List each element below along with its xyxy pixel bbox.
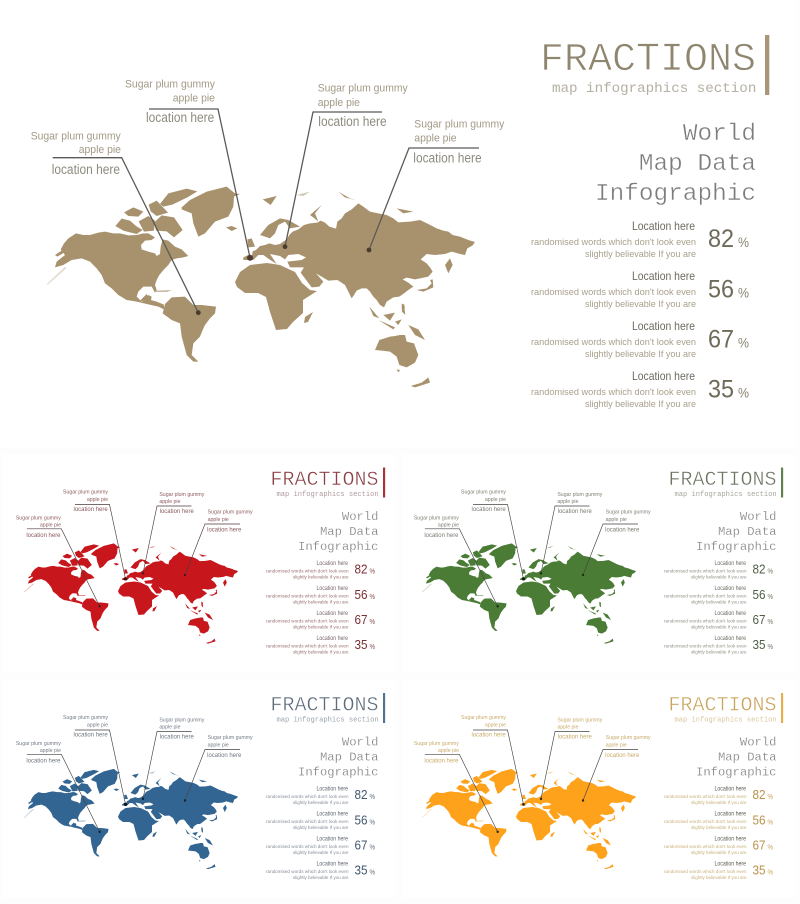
stat row: 67%: slightly believable If you are [585,348,696,359]
stat row: 67%: 67 [708,326,734,354]
heading: world map data infographic: Map Data [639,151,756,178]
stat row: 82%: % [738,234,749,250]
callout: central europe: location here [558,508,592,515]
callout: russia: apple pie [606,742,627,748]
callout: russia: apple pie [414,133,457,145]
callout: russia: location here [207,752,242,759]
stat row: 67%: randomised words which don't look even [266,618,349,624]
stat row: 56%: 56 [354,813,368,827]
stat row: 35%: randomised words which don't look even [531,386,696,397]
accent bar [781,693,783,723]
callout: west europe: location here [472,732,506,738]
world map [422,769,636,869]
stat row: 82% [664,561,773,580]
callout: central europe: apple pie [159,499,180,505]
callout: russia: location here [207,526,242,533]
stat row: 56% [266,812,375,830]
stat row: 67%: randomised words which don't look even [266,844,349,849]
stat row: 56%: 56 [752,813,766,827]
heading: world map data infographic [696,510,776,554]
stat row: 67%: % [768,619,773,626]
subheading: map infographics section [276,491,379,499]
world map [24,769,238,869]
stat row: 35% [531,369,749,409]
callout: south america: apple pie [40,522,61,528]
stat row: 35%: % [370,644,375,651]
callout: central europe: apple pie [557,724,578,730]
stat row: 35%: % [768,869,773,876]
stat row: 56%: % [370,819,375,826]
stat row: 35% [266,636,375,654]
stat row: 56%: Location here [714,586,747,592]
callout: west europe: apple pie [87,497,108,503]
heading: world map data infographic: Map Data [718,525,776,539]
callout: russia: Sugar plum gummy [606,735,651,741]
stat row: 82%: Location here [714,561,747,567]
callout: west europe: Sugar plum gummy [461,490,506,496]
world map [422,543,636,644]
stat row: 56%: slightly believable If you are [585,298,696,309]
callout: russia: Sugar plum gummy [208,735,253,741]
stat row: 67%: Location here [316,836,349,842]
accent bar [383,693,385,723]
stat row: 35%: % [738,384,749,400]
callout: central europe: Sugar plum gummy [557,717,603,723]
stat row: 56%: % [370,594,375,601]
callout: south america: apple pie [438,748,459,754]
stat row: 56%: randomised words which don't look even [664,594,747,598]
callout: russia: apple pie [208,742,229,748]
callout: russia [367,118,505,252]
callout: central europe [540,492,603,575]
callout: central europe [540,717,603,800]
stat row: 35%: randomised words which don't look even [266,644,349,648]
subheading: map infographics section [674,491,777,499]
world map [47,187,475,387]
stat row: 82%: slightly believable If you are [691,800,747,805]
callout: west europe [63,490,127,581]
heading: fractions: FRACTIONS [540,38,756,83]
stat row: 82%: slightly believable If you are [293,800,349,805]
stat row: 35%: slightly believable If you are [293,875,349,880]
stat row: 56%: Location here [632,269,695,283]
stat row: 35%: slightly believable If you are [691,875,747,880]
stat row: 82%: 82 [708,225,734,253]
stat row: 82%: 82 [752,562,766,576]
stat row: 56%: % [768,594,773,601]
callout: south america: apple pie [40,748,61,754]
heading: world map data infographic: World [740,736,776,750]
stat row: 35%: % [768,644,773,651]
heading: world map data infographic: Map Data [718,750,776,764]
stat row: 56%: Location here [316,586,349,592]
callout: central europe [142,717,205,800]
stat row: 67%: % [768,844,773,851]
callout: central europe: Sugar plum gummy [318,83,408,95]
callout: south america [414,516,499,608]
callout: west europe: apple pie [485,722,506,728]
callout: south america: apple pie [438,522,459,528]
callout: central europe: apple pie [159,724,180,730]
callout: south america: location here [424,758,459,764]
stat row: 67%: randomised words which don't look even [664,844,747,849]
stat row: 67%: Location here [714,836,747,842]
callout: central europe: Sugar plum gummy [557,492,603,498]
callout: west europe: location here [74,732,108,738]
stat row: 67%: % [370,844,375,851]
stat row: 67%: 67 [752,613,766,627]
stat row: 56% [531,269,749,309]
callout: west europe: Sugar plum gummy [63,715,108,721]
panel: blue slide [2,680,396,898]
stat row: 56%: % [738,284,749,300]
stat row: 56%: 56 [708,276,734,304]
callout: central europe: location here [318,114,387,129]
heading: world map data infographic: World [342,510,378,524]
stat row: 56%: randomised words which don't look even [266,819,349,824]
stat row: 67% [266,836,375,855]
panel: red slide [2,454,396,672]
heading: world map data infographic: World [342,736,378,750]
stat row: 82%: randomised words which don't look even [266,794,349,799]
stat row: 82%: Location here [714,786,747,792]
subheading: map infographics section [276,716,379,724]
panel: green slide [402,454,796,672]
stat row: 67% [266,611,375,630]
stat row: 82%: Location here [632,219,695,233]
stat row: 82%: slightly believable If you are [691,574,747,580]
stat row: 82%: randomised words which don't look even [531,236,696,247]
stat row: 56%: randomised words which don't look even [531,286,696,297]
stat row: 82%: 82 [354,788,368,802]
stat row: 56%: slightly believable If you are [293,600,349,604]
stat row: 67%: Location here [316,611,349,617]
subheading: map infographics section [552,81,756,97]
heading: world map data infographic: World [740,510,776,524]
callout: south america: Sugar plum gummy [414,741,459,747]
stat row: 67%: slightly believable If you are [293,624,349,630]
stat row: 35%: 35 [354,863,368,877]
heading: world map data infographic [696,736,776,780]
stat row: 82%: slightly believable If you are [293,574,349,580]
subheading: map infographics section [674,716,777,724]
stat row: 35%: slightly believable If you are [585,398,696,409]
heading: world map data infographic: Infographic [696,540,776,554]
callout: russia [184,510,253,576]
callout: west europe: location here [472,506,506,513]
stat row: 35%: randomised words which don't look even [664,869,747,874]
stat row: 56% [266,586,375,604]
callout: south america: Sugar plum gummy [414,516,459,522]
callout: russia: Sugar plum gummy [208,510,253,516]
callout: central europe: location here [160,508,194,515]
heading: world map data infographic: Infographic [298,540,378,554]
callout: west europe: apple pie [87,722,108,728]
stat row: 67% [664,611,773,630]
stat row: 35%: slightly believable If you are [691,650,747,654]
callout: south america: Sugar plum gummy [16,741,61,747]
stat row: 35%: % [370,869,375,876]
callout: central europe: apple pie [318,97,360,109]
world map [24,543,238,644]
heading: fractions: FRACTIONS [270,469,379,492]
callout: south america: apple pie [79,144,121,156]
stat row: 35%: randomised words which don't look even [664,644,747,648]
stat row: 67%: randomised words which don't look even [664,618,747,624]
stat row: 82%: 82 [354,562,368,576]
panel: orange slide [402,680,796,898]
callout: west europe: apple pie [485,497,506,503]
accent bar [765,35,769,95]
stat row: 67%: randomised words which don't look even [531,336,696,347]
callout: central europe [142,492,205,575]
callout: west europe [461,490,525,581]
stat row: 67%: Location here [632,319,695,333]
callout: south america: Sugar plum gummy [31,130,121,142]
heading: world map data infographic [595,121,756,208]
panel: beige main slide [0,0,796,448]
callout: russia [184,735,253,802]
stat row: 67%: slightly believable If you are [691,850,747,855]
stat row: 56%: Location here [316,812,349,818]
stat row: 82%: % [370,794,375,801]
stat row: 35%: Location here [714,862,747,868]
heading: world map data infographic [298,510,378,554]
stat row: 56%: 56 [354,588,368,602]
stat row: 82%: % [768,794,773,801]
callout: russia [582,735,651,802]
heading: fractions: FRACTIONS [668,469,777,492]
stat row: 35%: Location here [316,862,349,868]
stat row: 67%: % [370,619,375,626]
stat row: 35%: Location here [316,636,349,642]
callout: south america: location here [424,532,459,539]
heading: world map data infographic: Map Data [320,750,378,764]
callout: south america [16,741,101,833]
stat row: 56% [664,586,773,604]
stat row: 82%: 82 [752,788,766,802]
callout: central europe: apple pie [557,499,578,505]
stat row: 82% [266,786,375,805]
stat row: 67%: 67 [354,838,368,852]
stat row: 35% [664,862,773,880]
callout: south america: location here [26,532,61,539]
accent bar [781,468,783,498]
heading: world map data infographic: Infographic [696,766,776,780]
stat row: 56%: 56 [752,588,766,602]
stat row: 82% [531,219,749,259]
heading: world map data infographic: Infographic [298,766,378,780]
callout: russia: Sugar plum gummy [606,510,651,516]
callout: west europe: Sugar plum gummy [125,78,215,90]
stat row: 82% [266,561,375,580]
stat row: 56%: slightly believable If you are [293,825,349,830]
stat row: 82%: randomised words which don't look even [664,568,747,574]
stat row: 82%: Location here [316,786,349,792]
heading: world map data infographic [298,736,378,780]
callout: west europe: location here [146,110,214,125]
callout: south america [414,741,499,833]
stat row: 35% [266,862,375,880]
callout: south america: location here [52,162,120,177]
stat row: 35% [664,636,773,654]
stat row: 82%: % [370,568,375,576]
stat row: 56%: randomised words which don't look even [664,819,747,824]
heading: world map data infographic: Map Data [320,525,378,539]
callout: central europe [283,83,408,249]
callout: russia: apple pie [208,517,229,523]
callout: west europe [63,715,127,806]
heading: world map data infographic: Infographic [595,181,756,208]
stat row: 56%: Location here [714,812,747,818]
callout: west europe [125,78,253,261]
callout: west europe: Sugar plum gummy [461,715,506,721]
callout: west europe: apple pie [173,93,215,105]
callout: west europe: Sugar plum gummy [63,490,108,496]
stat row: 82%: slightly believable If you are [585,248,696,259]
callout: russia: location here [605,526,640,533]
stat row: 82% [664,786,773,805]
stat row: 56% [664,812,773,830]
stat row: 67%: % [738,334,749,350]
callout: central europe: location here [160,734,194,740]
stat row: 35%: 35 [752,863,766,877]
stat row: 82%: Location here [316,561,349,567]
stat row: 35%: 35 [752,638,766,652]
stat row: 82%: % [768,568,773,576]
stat row: 67% [664,836,773,855]
stat row: 56%: slightly believable If you are [691,600,747,604]
stat row: 35%: 35 [354,638,368,652]
stat row: 67%: slightly believable If you are [691,624,747,630]
stat row: 82%: randomised words which don't look even [664,794,747,799]
stat row: 56%: % [768,819,773,826]
callout: russia: Sugar plum gummy [414,118,505,130]
callout: west europe [461,715,525,806]
heading: fractions: FRACTIONS [668,694,777,718]
accent bar [383,468,385,498]
callout: south america: Sugar plum gummy [16,516,61,522]
heading: world map data infographic: World [683,121,756,148]
heading: fractions: FRACTIONS [270,694,379,718]
callout: central europe: location here [558,734,592,740]
callout: russia [582,510,651,576]
stat row: 35%: randomised words which don't look even [266,869,349,874]
stat row: 56%: randomised words which don't look even [266,594,349,598]
callout: russia: apple pie [606,517,627,523]
callout: central europe: Sugar plum gummy [159,717,205,723]
stat row: 67% [531,319,749,359]
stat row: 67%: 67 [752,838,766,852]
stat row: 67%: 67 [354,613,368,627]
callout: south america [31,130,201,315]
stat row: 56%: slightly believable If you are [691,825,747,830]
callout: south america [16,516,101,608]
stat row: 35%: slightly believable If you are [293,650,349,654]
callout: central europe: Sugar plum gummy [159,492,205,498]
callout: south america: location here [26,758,61,764]
stat row: 35%: Location here [714,636,747,642]
stat row: 35%: 35 [708,376,734,404]
callout: russia: location here [605,752,640,759]
callout: russia: location here [413,151,482,166]
callout: west europe: location here [74,506,108,513]
stat row: 82%: randomised words which don't look even [266,568,349,574]
stat row: 35%: Location here [632,369,695,383]
stat row: 67%: Location here [714,611,747,617]
stat row: 67%: slightly believable If you are [293,850,349,855]
